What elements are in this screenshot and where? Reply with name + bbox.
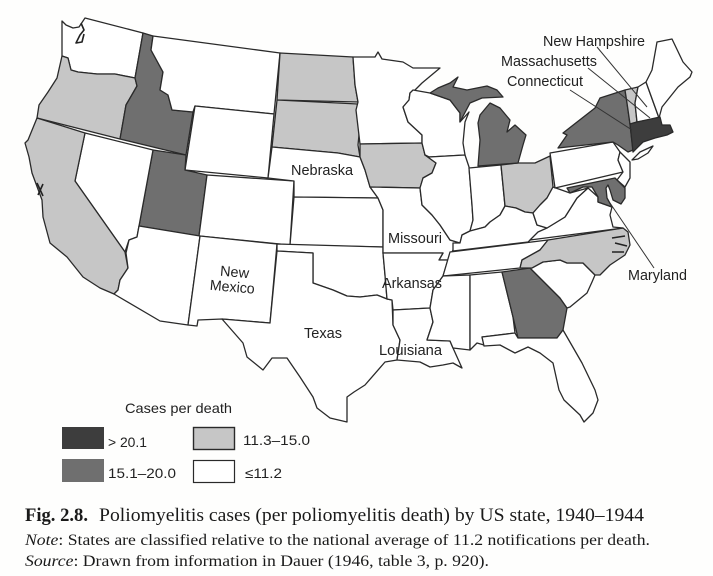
state: Nebraska bbox=[268, 147, 378, 198]
state: Kansas bbox=[290, 197, 383, 247]
source: Source : Drawn from information in Dauer (1946, table 3, p. 920). bbox=[25, 553, 489, 570]
figure title: Fig. 2.8. bbox=[25, 506, 88, 526]
label: Louisiana: Louisiana bbox=[379, 343, 443, 359]
state: Massachusetts, Connecticut and Rhode Island bbox=[630, 117, 673, 152]
state: Wyoming bbox=[185, 106, 274, 178]
state: Arizona bbox=[114, 226, 200, 325]
legend swatch: up to 11.2 bbox=[194, 460, 234, 482]
state: California bbox=[25, 118, 128, 294]
label: Texas: Texas bbox=[304, 326, 342, 342]
legend label: over 20.1: > 20.1 bbox=[108, 434, 147, 450]
state: South Carolina bbox=[530, 260, 595, 308]
map: US states bbox=[25, 18, 692, 422]
state: Mississippi bbox=[427, 275, 470, 350]
legend bbox=[62, 400, 310, 482]
state: Idaho bbox=[120, 33, 193, 155]
state: Washington bbox=[62, 18, 143, 78]
state: South Dakota bbox=[272, 100, 360, 157]
state: West Virginia bbox=[533, 187, 588, 228]
legend swatch: 11.3-15.0 bbox=[194, 428, 234, 450]
legend swatch: over 20.1 bbox=[62, 427, 104, 449]
state: Wisconsin bbox=[403, 90, 469, 157]
state: Montana bbox=[151, 36, 280, 114]
label leader: New Hampshire bbox=[597, 47, 647, 107]
state: Tennessee bbox=[443, 240, 548, 276]
state: Alabama bbox=[470, 272, 515, 350]
label: Connecticut: Connecticut bbox=[507, 74, 583, 90]
legend title: Cases per death bbox=[125, 400, 232, 416]
state: Utah bbox=[139, 150, 207, 236]
label: Missouri: Missouri bbox=[388, 231, 442, 247]
state: Kentucky bbox=[453, 206, 547, 251]
state: Florida bbox=[482, 330, 598, 422]
label leader: Maryland bbox=[610, 203, 654, 268]
label: Massachusetts: Massachusetts bbox=[501, 54, 597, 70]
coast detail: San Francisco Bay bbox=[37, 183, 43, 196]
figure title: Poliomyelitis cases (per poliomyelitis death) by US state, 1940–1944 bbox=[99, 506, 644, 526]
label: New Mexico: New bbox=[219, 264, 250, 282]
coast detail: Puget Sound bbox=[76, 23, 84, 43]
state: Vermont bbox=[625, 87, 638, 124]
legend swatch: 15.1-20.0 bbox=[62, 459, 104, 482]
state: Minnesota bbox=[353, 52, 440, 144]
state: Virginia bbox=[530, 188, 623, 240]
label: Maryland: Maryland bbox=[628, 268, 687, 284]
state labels bbox=[209, 34, 687, 359]
label: Nebraska: Nebraska bbox=[291, 163, 354, 179]
label: Arkansas: Arkansas bbox=[382, 276, 442, 292]
state: Louisiana bbox=[393, 308, 462, 368]
state: Missouri bbox=[370, 187, 460, 260]
state: Oklahoma bbox=[277, 244, 387, 299]
label: New Mexico: Mexico bbox=[209, 278, 255, 298]
state: Georgia bbox=[502, 268, 567, 338]
state: Michigan lower peninsula bbox=[478, 103, 526, 166]
state: North Dakota bbox=[277, 53, 358, 102]
label leader: Massachusetts bbox=[588, 68, 650, 118]
state: Illinois bbox=[420, 155, 473, 243]
state: Indiana bbox=[469, 165, 505, 231]
state: Iowa bbox=[360, 143, 436, 188]
state: Pennsylvania bbox=[550, 142, 623, 188]
legend label: 15.1-20.0: 15.1–20.0 bbox=[108, 465, 176, 481]
state: New Mexico bbox=[188, 236, 277, 326]
legend label: up to 11.2: ≤11.2 bbox=[245, 465, 282, 481]
state: New Hampshire bbox=[635, 82, 659, 122]
note: Note : States are classified relative to the national average of 11.2 notifications per death. bbox=[24, 532, 650, 549]
state: Nevada bbox=[75, 133, 153, 252]
state: Texas bbox=[222, 251, 400, 422]
state: Long Island bbox=[632, 146, 653, 160]
state: Colorado bbox=[199, 175, 294, 245]
state: Ohio bbox=[501, 156, 553, 213]
label: New Mexico bbox=[209, 263, 257, 298]
state: New Jersey bbox=[617, 152, 630, 187]
coast detail: North Carolina sounds bbox=[612, 236, 627, 252]
legend label: 11.3-15.0: 11.3–15.0 bbox=[243, 432, 310, 448]
state: Michigan upper peninsula bbox=[430, 77, 503, 122]
state: Oregon bbox=[37, 56, 137, 139]
label: New Hampshire: New Hampshire bbox=[543, 34, 645, 50]
state: Arkansas bbox=[383, 253, 448, 310]
label leader: Connecticut bbox=[570, 90, 632, 130]
state: North Carolina bbox=[520, 228, 630, 275]
state: Maine bbox=[646, 39, 692, 118]
state: New York bbox=[558, 90, 633, 152]
state: Maryland and Delaware bbox=[567, 178, 625, 207]
